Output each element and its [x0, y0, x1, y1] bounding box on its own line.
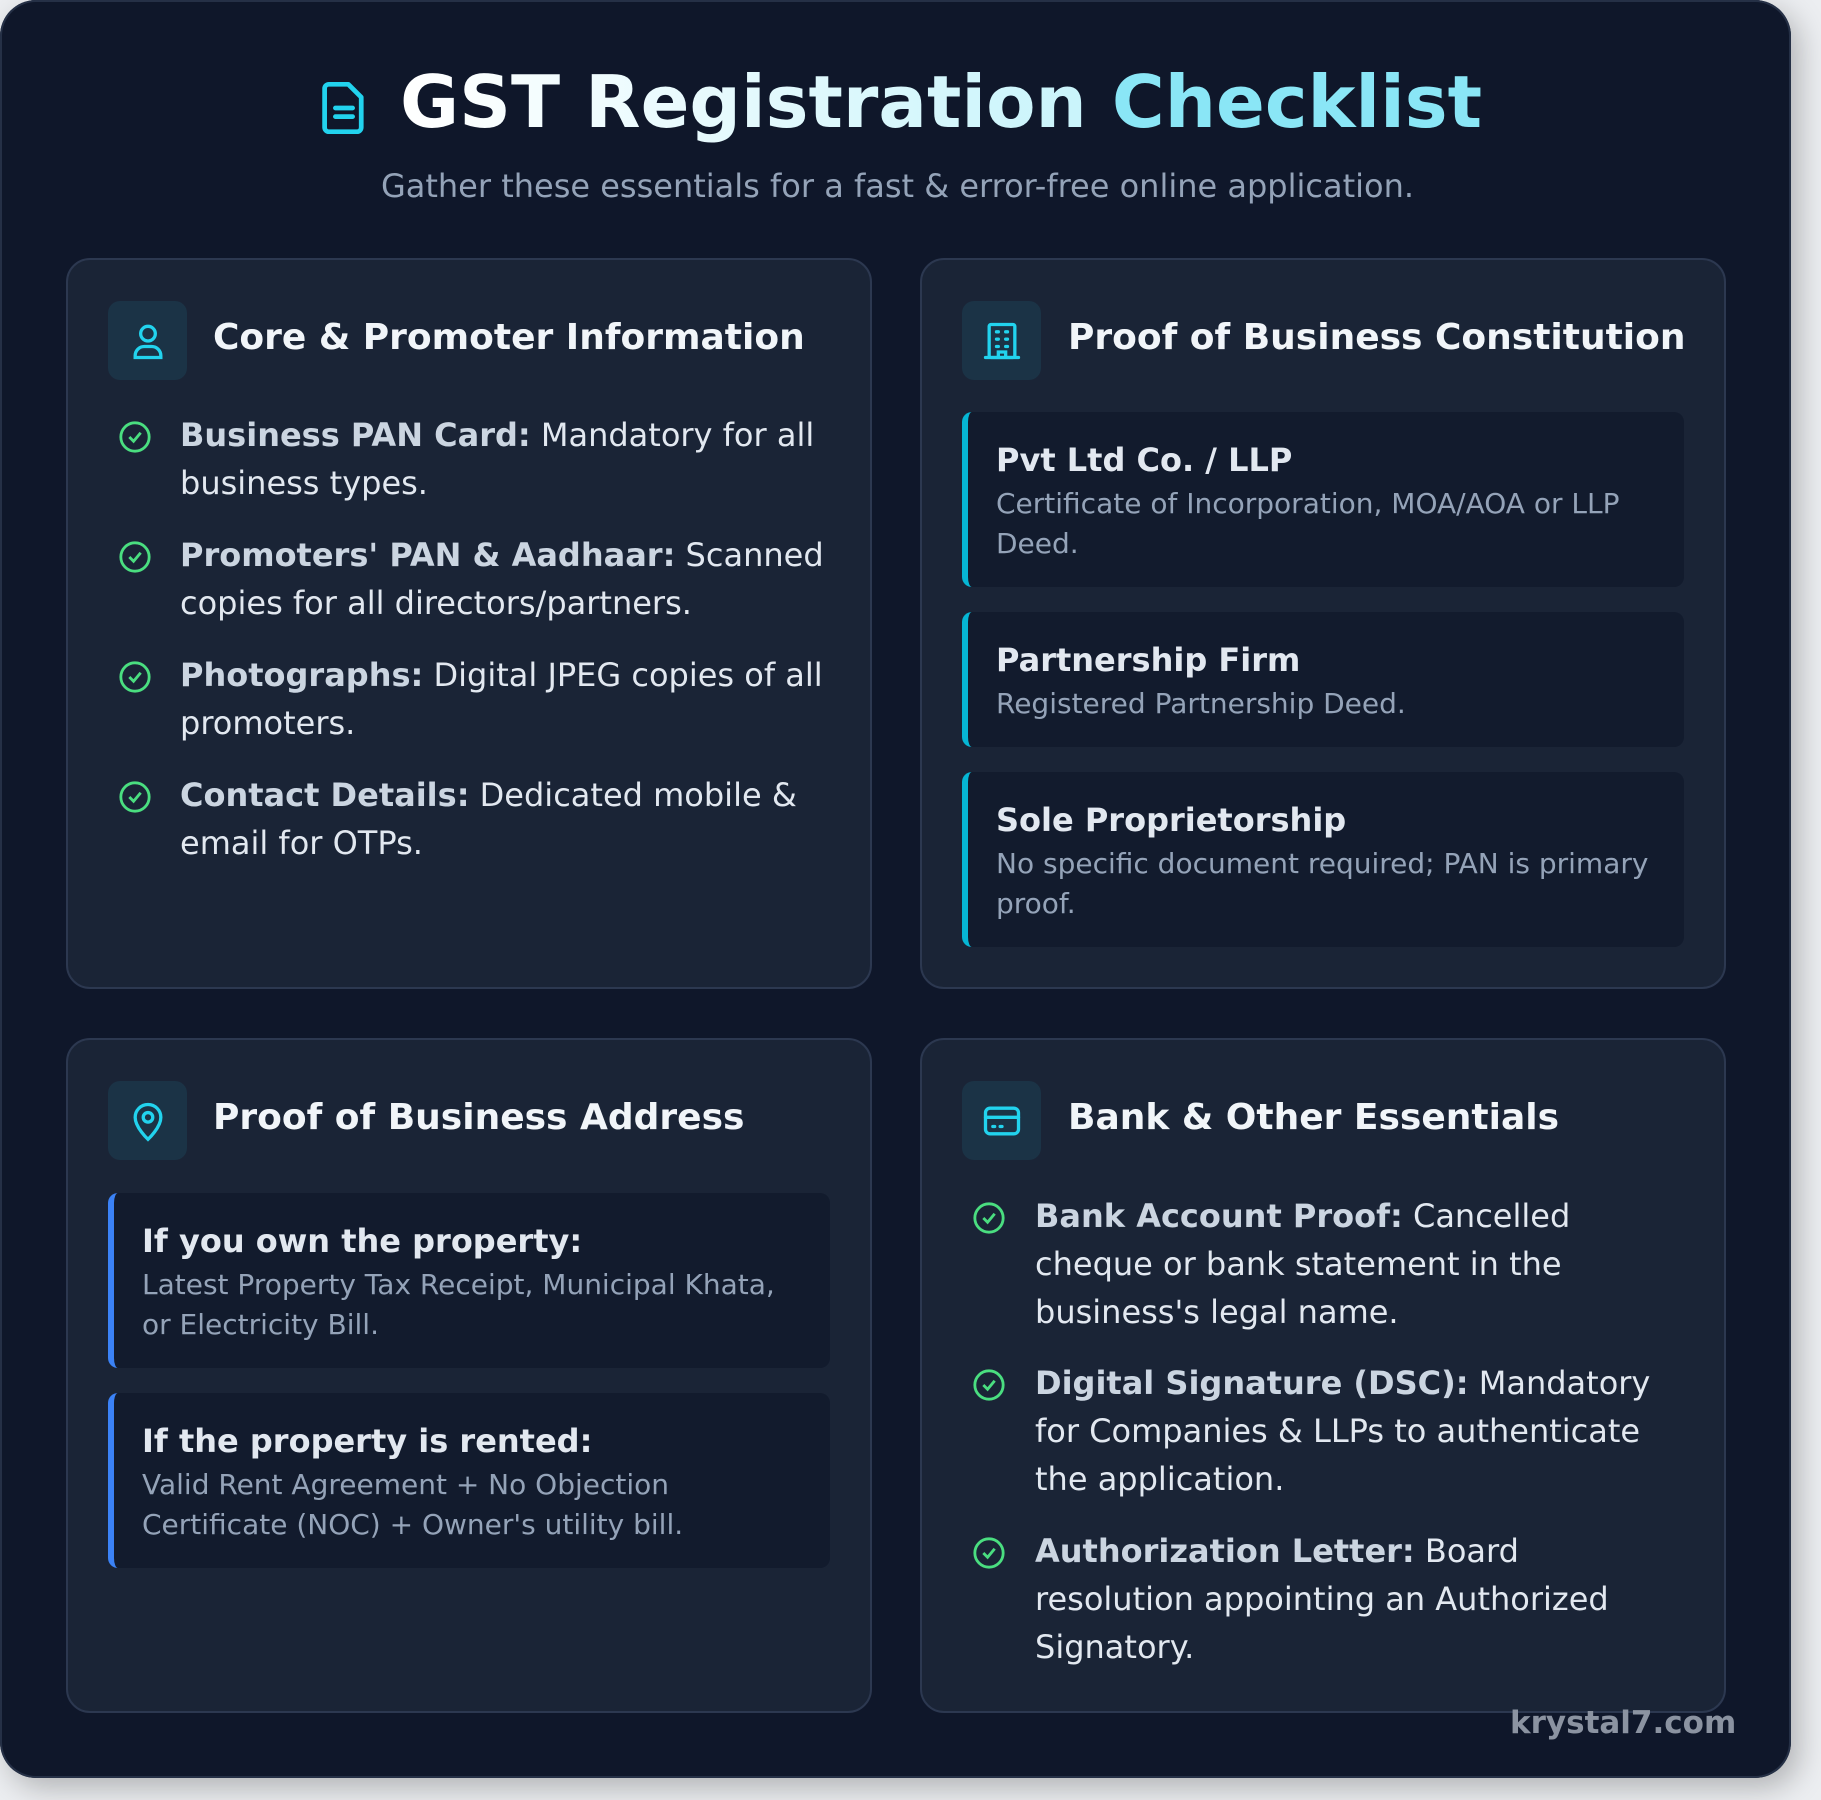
icon: location pin: [108, 1081, 187, 1160]
box: sole proprietorship: [962, 772, 1684, 947]
panel: core & promoter information: [66, 258, 872, 989]
title: GST Registration Checklist: [400, 60, 1482, 144]
checklist: core items: Business PAN Card: Mandatory for all: [180, 416, 814, 454]
item: PAN: [119, 416, 814, 502]
box: partnership: Registered Partnership Deed.: [996, 687, 1406, 720]
checklist: bank items: business's legal name.: [1035, 1293, 1399, 1331]
box: owned: or Electricity Bill.: [142, 1308, 379, 1341]
checklist: core items: email for OTPs.: [180, 824, 423, 862]
panel: business address: [66, 1038, 872, 1713]
checklist: core items: promoters.: [180, 704, 355, 742]
icon: building: [962, 301, 1041, 380]
checklist: bank items: the application.: [1035, 1460, 1284, 1498]
box: pvt ltd: Pvt Ltd Co. / LLP: [996, 441, 1292, 479]
checklist: bank items: [973, 1197, 1650, 1666]
item: bank proof: [973, 1197, 1570, 1331]
checklist: bank items: Signatory.: [1035, 1628, 1194, 1666]
box: rented: [108, 1393, 830, 1568]
box: rented: Certificate (NOC) + Owner's utility bill.: [142, 1508, 683, 1541]
checklist: bank items: Bank Account Proof: Cancelled: [1035, 1197, 1570, 1235]
box: sole proprietorship: No specific document required; PAN is primary: [996, 847, 1648, 880]
item: authorization letter: [973, 1532, 1609, 1666]
item: DSC: [973, 1364, 1650, 1498]
heading: address: Proof of Business Address: [213, 1097, 744, 1138]
item: promoters: [119, 536, 824, 622]
item: contact: [119, 776, 797, 862]
checklist: bank items: Digital Signature (DSC): Mandatory: [1035, 1364, 1650, 1402]
checklist: bank items: resolution appointing an Authorized: [1035, 1580, 1609, 1618]
box: owned: If you own the property:: [142, 1222, 582, 1260]
box: partnership: Partnership Firm: [996, 641, 1300, 679]
box: rented: If the property is rented:: [142, 1422, 592, 1460]
heading: bank: Bank & Other Essentials: [1068, 1097, 1559, 1138]
box: pvt ltd: Certificate of Incorporation, MOA/AOA or LLP: [996, 487, 1619, 520]
box: owned: [108, 1193, 830, 1368]
title icon: [322, 82, 364, 134]
box: rented: Valid Rent Agreement + No Objection: [142, 1468, 669, 1501]
checklist: bank items: Authorization Letter: Board: [1035, 1532, 1519, 1570]
box: sole proprietorship: Sole Proprietorship: [996, 801, 1346, 839]
box: pvt ltd: Deed.: [996, 527, 1079, 560]
watermark: krystal7.com: [1510, 1705, 1736, 1741]
heading: constitution: Proof of Business Constitution: [1068, 317, 1686, 358]
checklist: core items: business types.: [180, 464, 428, 502]
icon: card: [962, 1081, 1041, 1160]
heading: core: Core & Promoter Information: [213, 317, 805, 358]
checklist: bank items: for Companies & LLPs to authenticate: [1035, 1412, 1640, 1450]
checklist: core items: Promoters' PAN & Aadhaar: Scanned: [180, 536, 824, 574]
checklist: core items: copies for all directors/partners.: [180, 584, 692, 622]
box: owned: Latest Property Tax Receipt, Municipal Khata,: [142, 1268, 775, 1301]
box: partnership: [962, 612, 1684, 747]
checklist: core items: [119, 416, 824, 862]
icon: user: [108, 301, 187, 380]
item: photographs: [119, 656, 823, 742]
subtitle: Gather these essentials for a fast & error-free online application.: [381, 167, 1414, 205]
box: pvt ltd: [962, 412, 1684, 587]
checklist: core items: Contact Details: Dedicated mobile &: [180, 776, 797, 814]
checklist: bank items: cheque or bank statement in the: [1035, 1245, 1562, 1283]
panel: business constitution: [920, 258, 1726, 989]
panel: bank & other essentials: [920, 1038, 1726, 1713]
box: sole proprietorship: proof.: [996, 887, 1076, 920]
checklist: core items: Photographs: Digital JPEG copies of all: [180, 656, 823, 694]
